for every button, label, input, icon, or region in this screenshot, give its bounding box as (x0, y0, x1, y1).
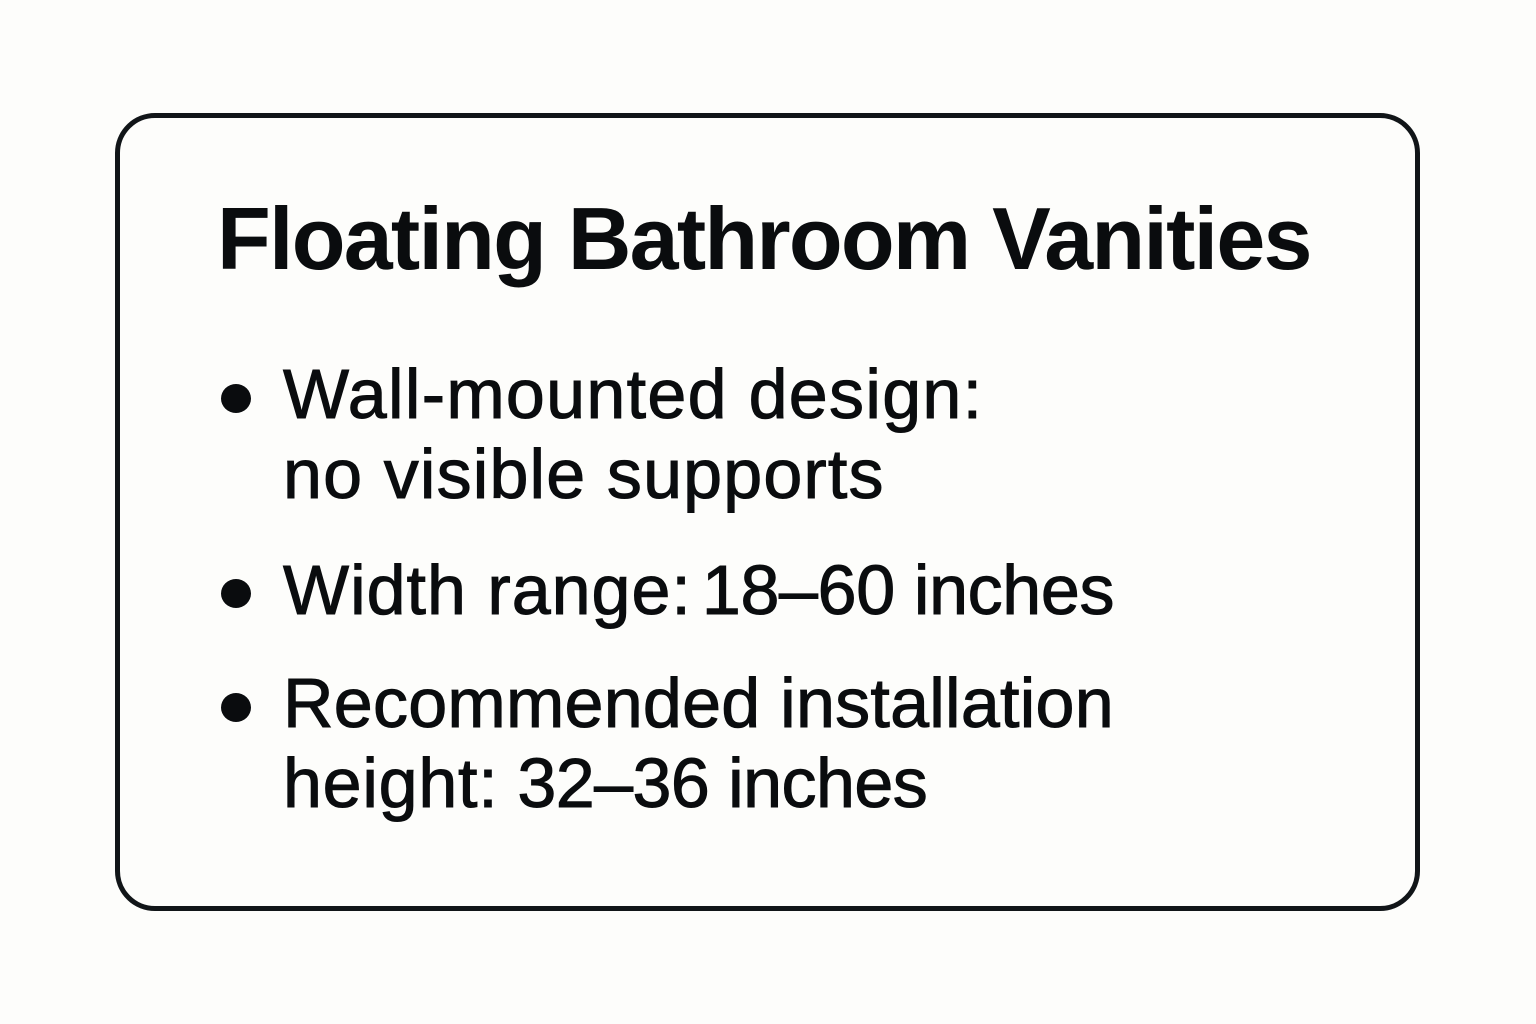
bullet icon: wall-mounted (221, 384, 251, 413)
bullet icon: installation height (221, 693, 251, 722)
text: installation height: Recommended installation (283, 664, 1114, 742)
text: wall-mounted design: Wall-mounted design: (283, 355, 983, 433)
text: wall-mounted design (282, 355, 983, 513)
text: installation height (283, 664, 1114, 822)
title: Floating Bathroom Vanities (217, 189, 1311, 288)
bullet icon: width range (221, 579, 251, 608)
panel: card (115, 113, 1420, 911)
text: wall-mounted design: no visible supports (283, 435, 885, 513)
text: width range: Width range:18–60 inches (283, 551, 1114, 629)
text: installation height: height: 32–36 inches (283, 744, 927, 822)
